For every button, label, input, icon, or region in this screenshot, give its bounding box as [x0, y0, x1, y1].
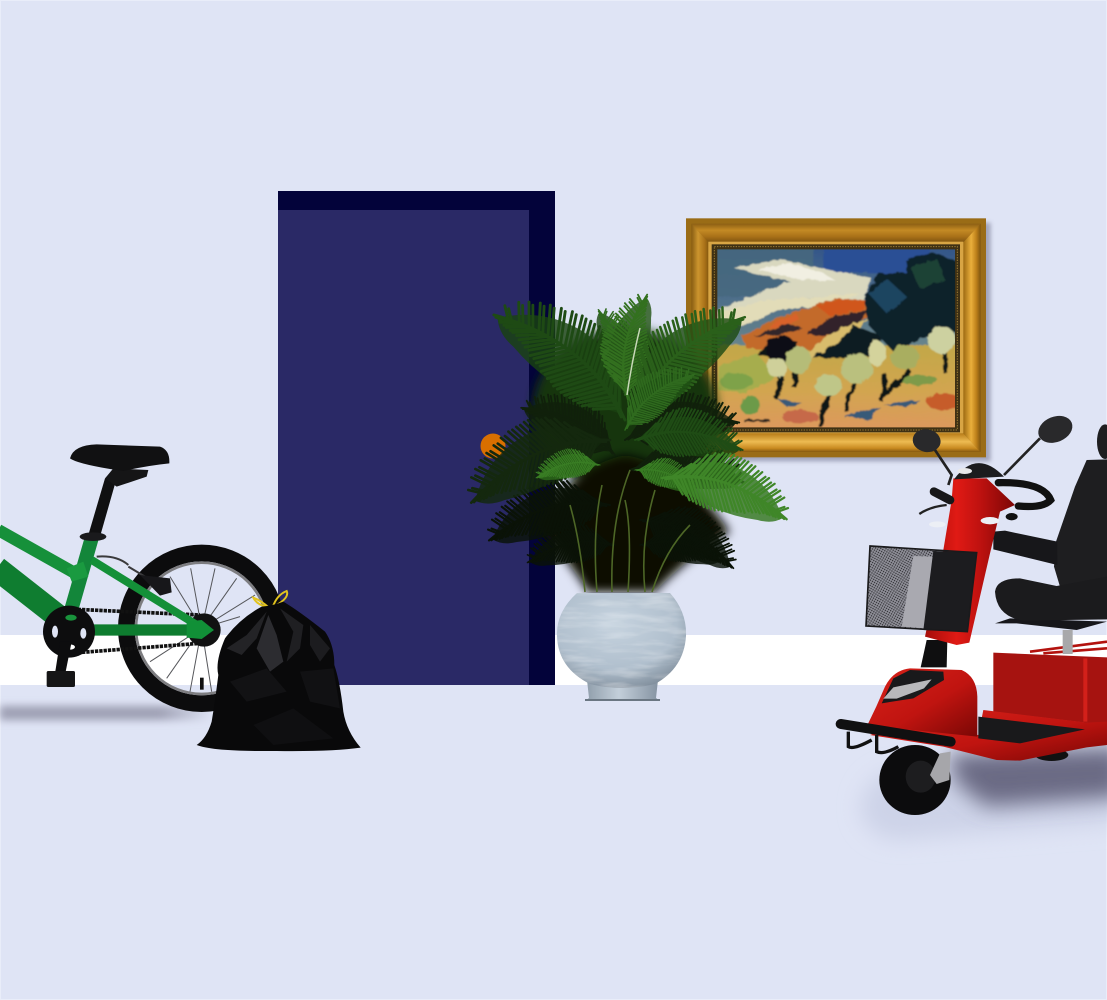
cushion: [995, 577, 1107, 621]
potted palm plant: [456, 267, 794, 701]
framed landscape painting: [686, 218, 991, 461]
door panel: [278, 210, 529, 685]
bicycle: [0, 444, 277, 720]
black garbage bag: [197, 591, 361, 751]
chain: [69, 609, 200, 653]
green frame: [0, 530, 214, 639]
wire basket: [866, 546, 977, 632]
painted landscape: [717, 249, 955, 428]
scooter floor shadow: [860, 747, 1107, 840]
battery box: [993, 642, 1107, 725]
chainring and pedal: [43, 606, 95, 687]
saddle: [70, 444, 169, 471]
frame shadow: [690, 223, 991, 461]
steering bellows: [921, 640, 947, 667]
sprocket: [187, 613, 221, 647]
left mirror: [911, 427, 952, 485]
bag folds: [227, 608, 340, 745]
gold frame: [686, 218, 986, 457]
ground shadow: [0, 706, 213, 720]
backrest: [1054, 459, 1107, 587]
front wheel: [879, 745, 951, 815]
white skirting band: [0, 635, 1107, 685]
seat pole: [1063, 630, 1073, 654]
plant pot: [557, 593, 686, 701]
right mirror: [1004, 411, 1076, 475]
shroud black cover: [882, 670, 944, 703]
red mobility scooter: [841, 411, 1107, 840]
door knob: [480, 434, 506, 458]
door frame: [278, 191, 555, 685]
handlebar and console: [919, 463, 1051, 527]
armrest: [993, 531, 1057, 565]
pot bowl: [557, 593, 686, 688]
headrest: [1097, 424, 1107, 459]
pot foot: [585, 680, 660, 701]
rear wheel: [1035, 749, 1068, 761]
pale frond midrib: [627, 328, 640, 395]
door: [278, 191, 555, 685]
seat: [993, 424, 1107, 654]
rear wheel: [126, 553, 277, 704]
yellow tie: [253, 591, 287, 607]
dark lower foliage: [456, 371, 746, 572]
bracket: [995, 618, 1107, 630]
front shroud: [867, 668, 977, 737]
bumper: [841, 724, 951, 753]
steering column: [925, 478, 1015, 645]
mid green fronds: [489, 267, 794, 524]
seatpost: [80, 468, 148, 541]
foliage background mass: [533, 328, 730, 592]
deck: [870, 710, 1107, 761]
stems: [570, 470, 690, 592]
bag body: [197, 602, 361, 751]
rear brake: [97, 556, 170, 592]
